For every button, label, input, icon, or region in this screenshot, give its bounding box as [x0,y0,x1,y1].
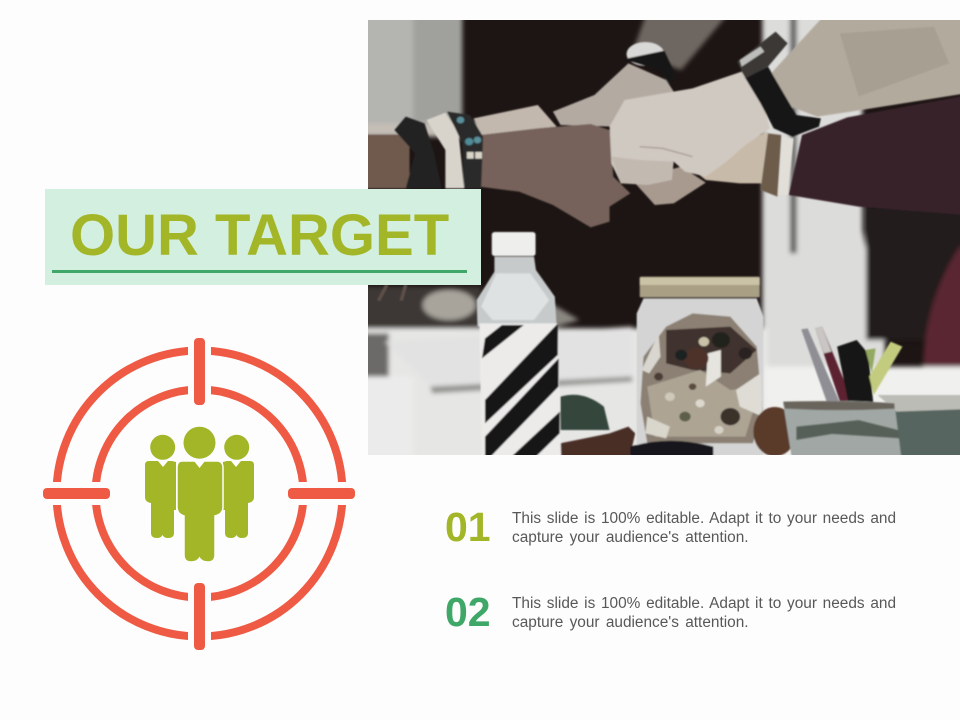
description 01: capture your audience's attention. [512,529,749,546]
icon: right person [223,435,254,538]
black lid [630,441,713,463]
title banner: OUR TARGET [45,189,481,285]
pen cup [782,400,902,455]
description 01: This slide is 100% editable. Adapt it to your needs and [512,510,896,527]
description 01 [512,510,896,546]
list item 02 [445,589,896,635]
jar [637,277,764,463]
bottle [477,232,561,463]
white fist [610,72,770,183]
background hands [474,105,557,135]
number 01: 01 [445,504,491,550]
left forearm and fist [368,134,411,189]
pens [801,327,902,407]
description 02 [512,595,896,631]
icon: centre person [177,427,223,562]
list item 01 [445,504,896,550]
icon: left person [145,435,176,538]
number 02: 02 [445,589,491,635]
bowl [889,395,960,463]
wooden knob [753,407,796,456]
third fist and wrist under [700,132,768,184]
photo: team fist bump above a desk with bottle, jar and pen cup [368,20,960,455]
heading underline [52,270,467,273]
heading text: OUR TARGET [70,203,449,268]
maroon sleeve [789,92,960,217]
cactus and pot [560,395,610,440]
description 02: capture your audience's attention. [512,614,749,631]
hairy arm [770,20,960,118]
bracelets [394,117,442,188]
white band and dark watch [777,137,794,195]
description 02: This slide is 100% editable. Adapt it to your needs and [512,595,896,612]
bracelet strings [379,285,406,301]
